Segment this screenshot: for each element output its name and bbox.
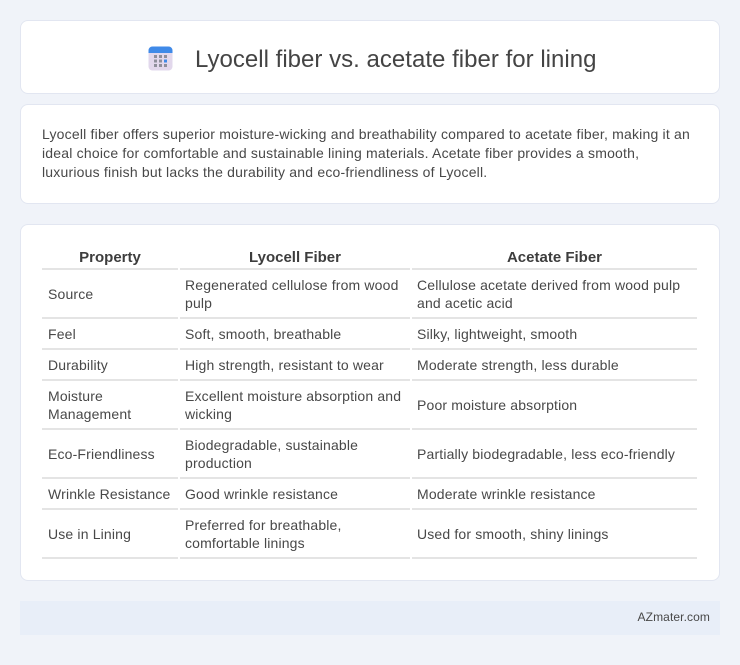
description text: Lyocell fiber offers superior moisture-wicking and breathability compared to acetate fiber, making it an: [42, 126, 690, 142]
table header: [42, 249, 697, 270]
row: Durability: High strength, resistant to wear: [185, 357, 384, 373]
row: Moisture Management: wicking: [185, 406, 232, 422]
table header: Lyocell Fiber: [249, 249, 341, 266]
row: Feel: Feel: [48, 326, 76, 342]
comparison table panel: [20, 224, 720, 581]
row: Durability: [42, 357, 697, 381]
row: Use in Lining: Used for smooth, shiny linings: [417, 526, 609, 542]
description text: ideal choice for comfortable and sustainable lining materials. Acetate fiber provides a smooth,: [42, 145, 639, 161]
description text: luxurious finish but lacks the durability and eco-friendliness of Lyocell.: [42, 164, 487, 180]
row: Moisture Management: [42, 388, 697, 430]
row: Durability: Durability: [48, 357, 108, 373]
row: Eco-Friendliness: production: [185, 455, 252, 471]
description text: [42, 126, 690, 180]
footer credit: AZmater.com: [638, 610, 710, 624]
icon: calendar grid: [148, 46, 172, 70]
row: Moisture Management: Management: [48, 406, 131, 422]
row: Moisture Management: Excellent moisture absorption and: [185, 388, 401, 404]
row: Source: [42, 277, 697, 319]
table header: Acetate Fiber: [507, 249, 602, 266]
row: Eco-Friendliness: Partially biodegradable, less eco-friendly: [417, 446, 675, 462]
row: Wrinkle Resistance: Wrinkle Resistance: [48, 486, 170, 502]
row: Eco-Friendliness: Biodegradable, sustainable: [185, 437, 358, 453]
row: Feel: Soft, smooth, breathable: [185, 326, 341, 342]
row: Use in Lining: [42, 517, 697, 559]
row: Use in Lining: Use in Lining: [48, 526, 131, 542]
row: Moisture Management: Moisture: [48, 388, 103, 404]
row: Source: pulp: [185, 295, 212, 311]
row: Durability: Moderate strength, less durable: [417, 357, 619, 373]
row: Feel: Silky, lightweight, smooth: [417, 326, 577, 342]
row: Wrinkle Resistance: Good wrinkle resistance: [185, 486, 338, 502]
title: Lyocell fiber vs. acetate fiber for lining: [195, 46, 596, 73]
title panel: [20, 20, 720, 94]
row: Wrinkle Resistance: [42, 486, 697, 510]
footer bar: [20, 601, 720, 635]
table header: Property: [79, 249, 141, 266]
row: Moisture Management: Poor moisture absorption: [417, 397, 577, 413]
row: Use in Lining: comfortable linings: [185, 535, 305, 551]
description panel: [20, 104, 720, 204]
row: Use in Lining: Preferred for breathable,: [185, 517, 342, 533]
row: Feel: [42, 326, 697, 350]
row: Source: Source: [48, 286, 93, 302]
row: Source: Regenerated cellulose from wood: [185, 277, 399, 293]
row: Eco-Friendliness: [42, 437, 697, 479]
row: Wrinkle Resistance: Moderate wrinkle resistance: [417, 486, 596, 502]
row: Source: and acetic acid: [417, 295, 513, 311]
row: Eco-Friendliness: Eco-Friendliness: [48, 446, 155, 462]
row: Source: Cellulose acetate derived from wood pulp: [417, 277, 680, 293]
